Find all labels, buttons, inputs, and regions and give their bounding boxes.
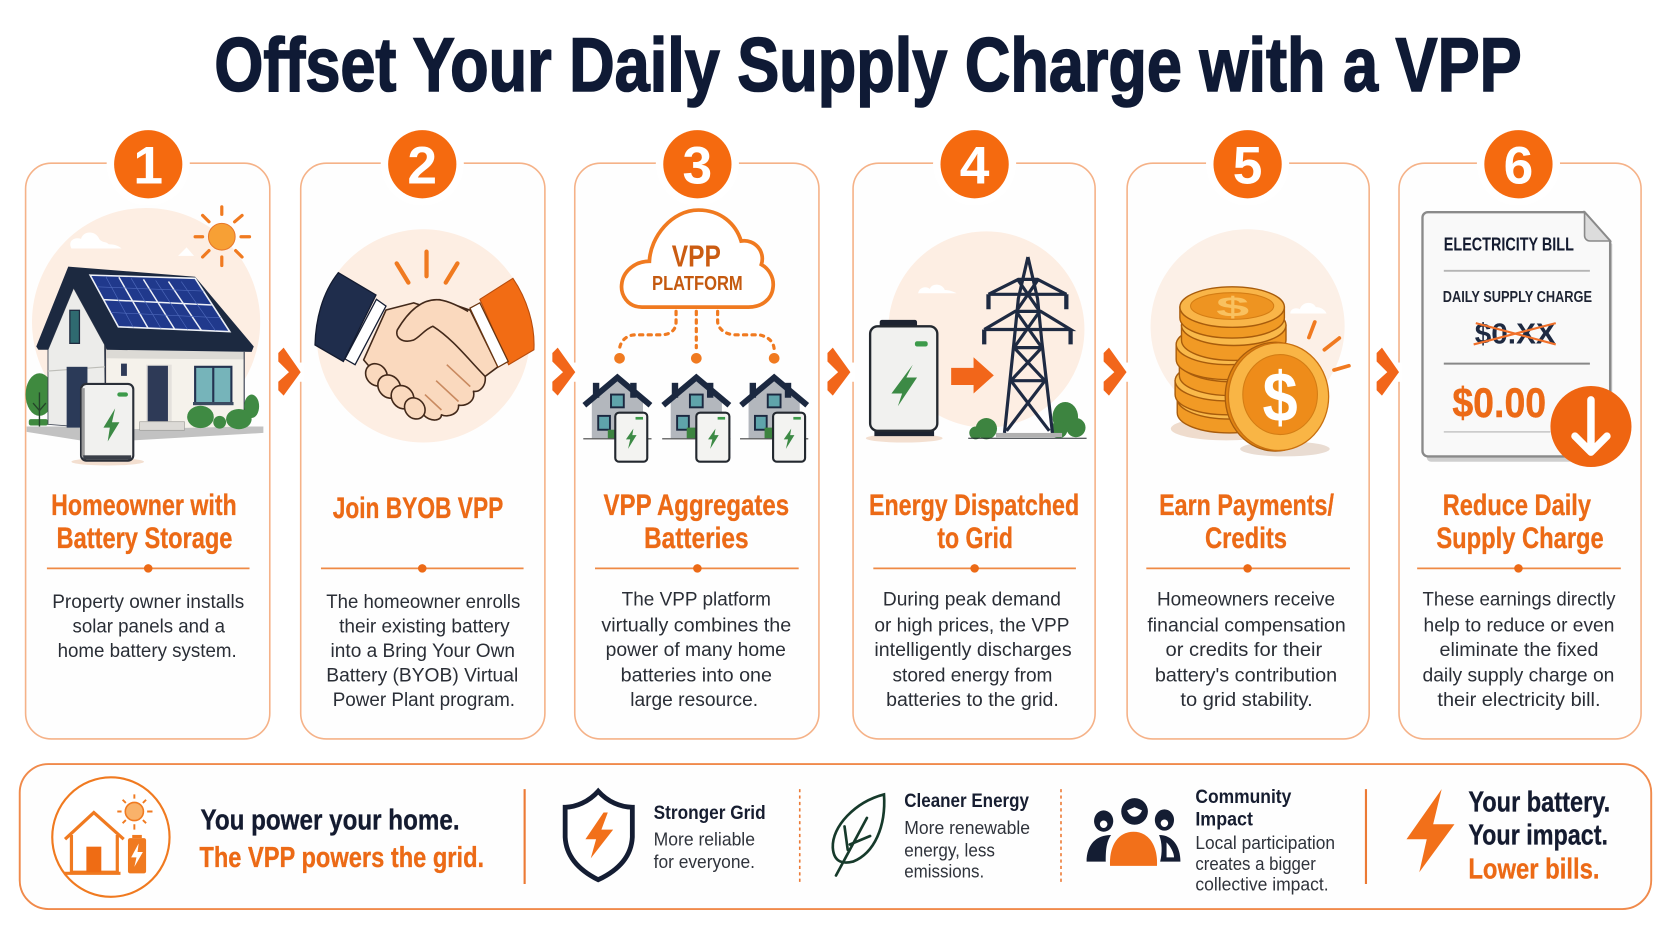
card frame [301, 163, 545, 739]
arrow: step 1 to 2 [278, 348, 304, 396]
number badge 2: 2 [407, 136, 437, 195]
transmission tower [984, 257, 1071, 433]
number badge 3 [656, 123, 739, 206]
number badge 3: 3 [683, 136, 712, 195]
home with battery 2 [662, 377, 730, 462]
step heading [1159, 489, 1334, 555]
slogan: your battery your impact lower bills [1468, 786, 1610, 886]
benefit: community impact: Community [1195, 787, 1292, 808]
panel: bottom summary banner [20, 764, 1651, 909]
arrow: step 5 to 6 [1377, 348, 1402, 396]
number badge 6: 6 [1504, 136, 1533, 195]
step description: home battery system. [58, 641, 237, 662]
home with battery 1 [583, 377, 652, 462]
illustration: electricity bill reduced to zero [1422, 212, 1631, 467]
step description: intelligently discharges [874, 640, 1072, 661]
step description: power of many home [606, 640, 786, 661]
benefit: community impact: Impact [1195, 809, 1253, 830]
icon: home with sun and battery [52, 777, 170, 897]
step description: daily supply charge on [1422, 665, 1614, 686]
slogan: power the grid: You power your home. [200, 805, 460, 837]
panel: step 6 [1399, 123, 1641, 739]
step heading [869, 489, 1079, 555]
step description: eliminate the fixed [1440, 640, 1598, 661]
step description [601, 590, 791, 711]
arrow: step 3 to 4 [827, 348, 855, 396]
step description: Battery (BYOB) Virtual [326, 665, 518, 686]
panel: step 2 [301, 123, 545, 739]
benefit: cleaner energy: More renewable [904, 818, 1030, 838]
illustration: electricity bill reduced to zero: $0.00 [1452, 379, 1546, 426]
step heading: to Grid [937, 522, 1013, 555]
step description [1422, 590, 1616, 711]
step description: Homeowners receive [1157, 590, 1335, 611]
panel: step 3 [575, 123, 819, 739]
banner frame [20, 764, 1651, 909]
benefit: community impact [1195, 787, 1335, 894]
benefit: community impact: collective impact. [1195, 874, 1329, 894]
step heading: VPP Aggregates [604, 489, 789, 522]
step heading: Supply Charge [1436, 522, 1604, 555]
step description: Property owner installs [52, 592, 244, 613]
cloud with VPP platform label [622, 210, 773, 307]
icon: leaf [833, 794, 884, 875]
benefit: cleaner energy: emissions. [904, 862, 984, 882]
step heading [604, 489, 789, 555]
step heading: Earn Payments/ [1159, 489, 1334, 522]
slogan: power the grid: The VPP powers the grid. [199, 842, 484, 874]
arrow: step 4 to 5 [1104, 348, 1130, 396]
number badge 4 [933, 123, 1016, 206]
card frame [1399, 163, 1641, 739]
number badge 5 [1206, 123, 1289, 206]
number badge 1: 1 [133, 136, 163, 195]
number badge 4: 4 [960, 136, 990, 195]
step description: stored energy from [893, 665, 1052, 686]
step description [1147, 590, 1346, 711]
illustration: handshake [315, 229, 534, 443]
step heading: Battery Storage [57, 522, 232, 555]
step heading: Homeowner with [51, 489, 237, 522]
step description: help to reduce or even [1424, 615, 1614, 636]
step description: financial compensation [1147, 615, 1346, 636]
step description: batteries to the grid. [886, 690, 1059, 711]
panel: step 4 [853, 123, 1095, 739]
benefit: cleaner energy: energy, less [904, 840, 995, 860]
illustration: battery dispatching energy to transmission tower [866, 231, 1087, 443]
step heading [1436, 489, 1604, 555]
icon: community people [1087, 798, 1180, 866]
benefit: stronger grid: for everyone. [654, 852, 755, 872]
step description [326, 592, 520, 711]
arrow to tower [951, 357, 994, 393]
step heading: Credits [1205, 522, 1287, 555]
slogan: your battery your impact lower bills: Lower bills. [1468, 854, 1599, 886]
benefit: stronger grid: Stronger Grid [654, 803, 766, 824]
arrow: step 2 to 3 [552, 348, 578, 396]
step description: During peak demand [883, 590, 1061, 611]
illustration: electricity bill reduced to zero: ELECTRICITY BILL [1444, 235, 1574, 255]
step description: large resource. [630, 690, 758, 711]
step description: The VPP platform [622, 590, 771, 611]
home with battery 3 [740, 377, 808, 462]
step description: Power Plant program. [333, 690, 515, 711]
illustration: stack of dollar coins: $ [1263, 358, 1298, 437]
illustration: house with solar panels and battery [26, 207, 263, 465]
step description: These earnings directly [1422, 590, 1616, 611]
step description: virtually combines the [601, 615, 791, 636]
illustration: stack of dollar coins: $ [1216, 292, 1250, 323]
illustration: VPP cloud platform connected to homes [583, 210, 808, 462]
panel: step 1 [26, 123, 270, 739]
slogan: your battery your impact lower bills: Your impact. [1468, 820, 1608, 852]
benefit: stronger grid [654, 803, 766, 872]
benefit: community impact: creates a bigger [1195, 854, 1316, 874]
panel: step 5 [1127, 123, 1369, 739]
step description [52, 592, 244, 662]
step description: to grid stability. [1180, 690, 1313, 711]
step description: or credits for their [1165, 640, 1323, 661]
benefit: cleaner energy [904, 791, 1030, 882]
benefit: stronger grid: More reliable [654, 830, 755, 850]
cloud with VPP platform label: VPP [672, 239, 721, 274]
slogan: your battery your impact lower bills: Your battery. [1468, 786, 1610, 818]
benefit: community impact: Local participation [1195, 833, 1335, 853]
step description: solar panels and a [73, 616, 225, 637]
step description: their electricity bill. [1437, 690, 1601, 711]
benefit: cleaner energy: Cleaner Energy [904, 791, 1029, 812]
step heading [51, 489, 237, 555]
illustration: electricity bill reduced to zero: DAILY SUPPLY CHARGE [1443, 289, 1592, 306]
card frame [26, 163, 270, 739]
number badge 1 [107, 123, 190, 206]
step description [874, 590, 1072, 711]
card frame [1127, 163, 1369, 739]
step description: into a Bring Your Own [331, 641, 515, 662]
down arrow badge [1550, 386, 1631, 467]
number badge 2 [381, 123, 464, 206]
step heading: Energy Dispatched [869, 489, 1079, 522]
card frame [575, 163, 819, 739]
step description: batteries into one [621, 665, 772, 686]
number badge 6 [1477, 123, 1560, 206]
icon: shield with bolt [565, 791, 632, 880]
icon: lightning bolt [1406, 789, 1454, 872]
illustration: stack of dollar coins [1151, 229, 1349, 456]
step heading: Join BYOB VPP [333, 492, 503, 525]
step description: The homeowner enrolls [326, 592, 520, 613]
number badge 5: 5 [1233, 136, 1262, 195]
cloud with VPP platform label: PLATFORM [652, 273, 743, 295]
slogan: power the grid [199, 805, 484, 874]
step description: or high prices, the VPP [874, 615, 1070, 636]
step description: battery's contribution [1155, 665, 1337, 686]
step heading: Batteries [644, 522, 749, 555]
illustration: electricity bill reduced to zero: $0.XX [1475, 318, 1556, 350]
step description: their existing battery [339, 616, 510, 637]
step heading: Reduce Daily [1443, 489, 1591, 522]
card frame [853, 163, 1095, 739]
